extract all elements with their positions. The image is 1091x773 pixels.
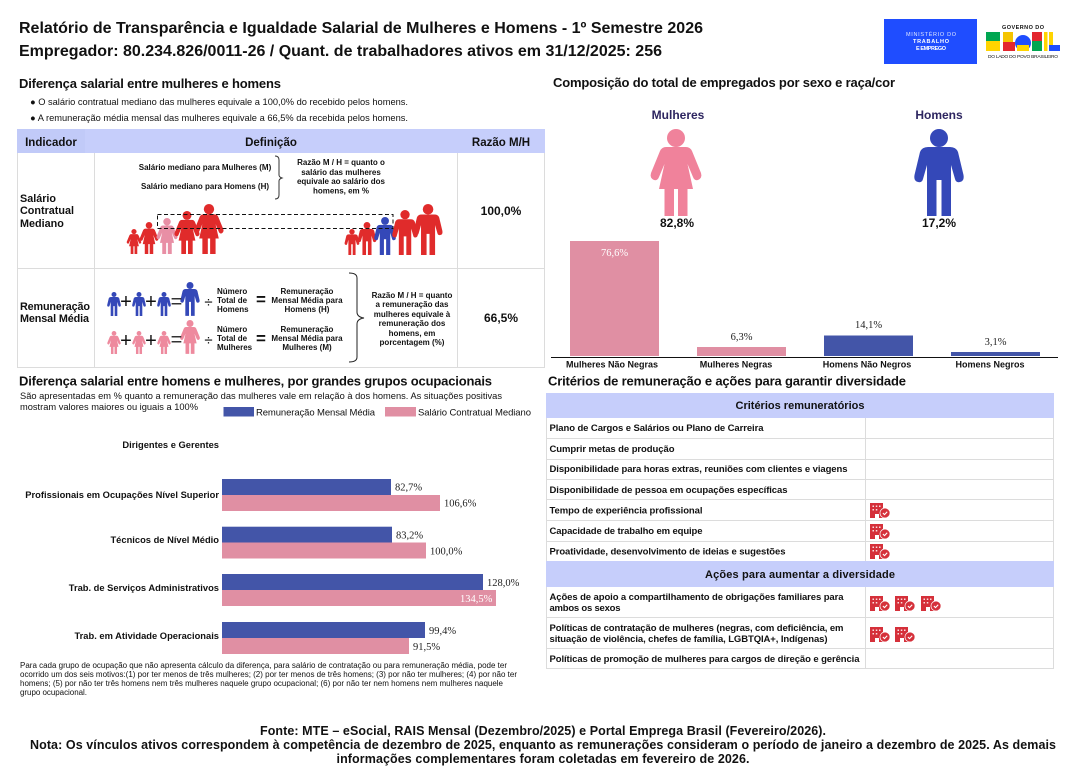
table header xyxy=(17,129,545,153)
footer: fonte e nota: Fonte: MTE – eSocial, RAIS Mensal (Dezembro/2025) e Portal Emprega Brasil (Fevereiro/2026). xyxy=(260,724,826,738)
footnote: ocorrido um dos seis motivos:(1) por ter menos de três mulheres; (2) por ter menos de três homens; (3) por não ter mulheres; (4) por não ter xyxy=(20,670,517,679)
group: administrativos: 128,0% xyxy=(487,578,520,589)
group: técnicos: 83,2% xyxy=(396,530,423,542)
row: remuneração mensal média: Mensal Média xyxy=(20,313,90,325)
row: remuneração mensal média: Mulheres (M) xyxy=(282,343,332,352)
panel: tabela de indicadores xyxy=(17,129,545,368)
row: remuneração mensal média: Remuneração xyxy=(20,301,90,313)
bullets: resumo: ● A remuneração média mensal das mulheres equivale a 66,5% da recebida pelos homens. xyxy=(30,113,408,123)
row: salário contratual mediano: Salário mediano para Homens (H) xyxy=(141,182,269,191)
footnote: grupo ocupacional. xyxy=(20,688,87,697)
text: explicação do gráfico xyxy=(20,391,502,412)
row: remuneração mensal média xyxy=(20,273,518,362)
row: remuneração mensal média: ÷ xyxy=(204,332,213,349)
row: remuneração mensal média: Número xyxy=(217,325,247,334)
table header: Indicador xyxy=(25,137,77,149)
header: critérios remuneratórios: Critérios remuneratórios xyxy=(736,400,864,412)
rows: critérios: Plano de Cargos e Salários ou Plano de Carreira xyxy=(550,423,764,434)
row: salário contratual mediano: Mediano xyxy=(20,218,64,230)
figure: homens xyxy=(914,108,964,230)
legend: Remuneração Mensal Média xyxy=(256,408,376,418)
footnote xyxy=(20,661,517,697)
group: operacionais: 91,5% xyxy=(413,642,440,653)
title: Relatório de Transparência e Igualdade Salarial de Mulheres e Homens - 1º Semestre 2026 xyxy=(19,20,703,37)
row: remuneração mensal média: + xyxy=(120,291,132,313)
group: operacionais xyxy=(74,622,456,654)
rows: critérios: Capacidade de trabalho em equipe xyxy=(550,526,702,537)
table header: Razão M/H xyxy=(472,137,530,149)
row: remuneração mensal média: remuneração dos xyxy=(379,319,446,328)
group: profissionais: Profissionais em Ocupações Nível Superior xyxy=(25,490,219,500)
bar chart: composição por sexo e raça: 14,1% xyxy=(855,320,882,331)
rows: critérios xyxy=(550,423,848,558)
row: remuneração mensal média: Homens xyxy=(217,305,249,314)
bar chart: composição por sexo e raça xyxy=(551,241,1058,370)
footnote: Para cada grupo de ocupação que não apresenta cálculo da diferença, para salário de contratação ou para remuneração média, pode ter xyxy=(20,661,507,670)
bar chart: composição por sexo e raça: 3,1% xyxy=(985,337,1007,348)
row: remuneração mensal média: Remuneração xyxy=(281,287,334,296)
group: administrativos: 134,5% xyxy=(460,594,493,605)
row: remuneração mensal média: Mensal Média para xyxy=(271,296,343,305)
panel: critérios e ações xyxy=(546,393,1054,668)
row: salário contratual mediano: Contratual xyxy=(20,205,74,217)
heading: diferença salarial: Diferença salarial entre mulheres e homens xyxy=(19,76,281,91)
group: administrativos: Trab. de Serviços Administrativos xyxy=(69,583,219,593)
text: explicação do gráfico: São apresentadas em % quanto a remuneração das mulheres vale em relação à dos homens. As situações positivas xyxy=(20,391,502,401)
row: remuneração mensal média: = xyxy=(256,290,266,309)
rows: ações xyxy=(550,592,860,665)
icons: ações xyxy=(870,596,941,642)
group: profissionais xyxy=(25,479,477,511)
text: explicação do gráfico: mostram valores maiores ou iguais a 100% xyxy=(20,402,198,412)
row: remuneração mensal média: = xyxy=(256,329,266,348)
logo: ministério e governo xyxy=(884,19,1060,64)
group: operacionais: Trab. em Atividade Operacionais xyxy=(74,631,219,641)
figure: mulheres: Mulheres xyxy=(652,108,705,122)
row: remuneração mensal média: ÷ xyxy=(204,294,213,311)
row: remuneração mensal média: porcentagem (%) xyxy=(380,338,445,347)
icons: mulheres xyxy=(127,204,224,254)
equação: homens xyxy=(107,282,200,316)
group: profissionais: 82,7% xyxy=(395,482,422,494)
row: remuneração mensal média: Mensal Média para xyxy=(271,334,343,343)
row: remuneração mensal média: Razão M / H = quanto xyxy=(372,291,452,300)
table header: Definição xyxy=(245,137,297,149)
icons: homens xyxy=(345,204,443,255)
icons: critérios xyxy=(870,503,890,559)
footer: fonte e nota: Nota: Os vínculos ativos correspondem à competência de dezembro de 2025, enquanto as remunerações consideram o período de janeiro a dezembro de 2025. As demais xyxy=(30,738,1056,752)
row: remuneração mensal média: = xyxy=(171,291,182,313)
row: salário contratual mediano xyxy=(20,156,522,255)
bar chart: composição por sexo e raça: 76,6% xyxy=(601,248,628,259)
rows: ações: Políticas de contratação de mulheres (negras, com deficiência, em xyxy=(550,623,844,634)
group: profissionais: 106,6% xyxy=(444,498,477,510)
figure: mulheres xyxy=(651,108,705,230)
group: técnicos xyxy=(110,527,463,558)
row: remuneração mensal média: Número xyxy=(217,287,247,296)
row: remuneração mensal média: a remuneração das xyxy=(376,300,449,309)
logo: ministério e governo: TRABALHO xyxy=(913,39,950,45)
heading: grupos ocupacionais: Diferença salarial entre homens e mulheres, por grandes grupos ocupacionais xyxy=(19,374,492,388)
title xyxy=(19,20,703,60)
row: salário contratual mediano: 100,0% xyxy=(481,204,522,218)
rows: critérios: Proatividade, desenvolvimento de ideias e sugestões xyxy=(550,546,786,558)
row: salário contratual mediano: homens, em % xyxy=(313,186,369,196)
logo: ministério e governo: DO LADO DO POVO BRASILEIRO xyxy=(988,54,1058,60)
rows: critérios: Disponibilidade para horas extras, reuniões com clientes e viagens xyxy=(550,464,848,475)
title: Empregador: 80.234.826/0011-26 / Quant. de trabalhadores ativos em 31/12/2025: 256 xyxy=(19,43,662,60)
bar chart: composição por sexo e raça: Mulheres Não Negras xyxy=(566,360,658,370)
group: operacionais: 99,4% xyxy=(429,626,456,637)
bullets: resumo: ● O salário contratual mediano das mulheres equivale a 100,0% do recebido pelos homens. xyxy=(30,97,408,107)
row: salário contratual mediano: salário das mulheres xyxy=(301,168,381,177)
row: salário contratual mediano: Salário xyxy=(20,193,56,205)
row: salário contratual mediano: equivale ao salário dos xyxy=(297,177,386,186)
group: técnicos: Técnicos de Nível Médio xyxy=(110,535,219,545)
row: salário contratual mediano: Razão M / H = quanto o xyxy=(297,158,385,167)
row: remuneração mensal média: Remuneração xyxy=(281,325,334,334)
figure: mulheres: 82,8% xyxy=(660,216,694,230)
row: remuneração mensal média: 66,5% xyxy=(484,311,518,325)
row: remuneração mensal média: + xyxy=(120,330,132,352)
row: remuneração mensal média: = xyxy=(171,329,182,351)
row: remuneração mensal média: Total de xyxy=(217,296,248,305)
legend: Salário Contratual Mediano xyxy=(418,408,531,418)
group: administrativos xyxy=(69,574,520,606)
row: remuneração mensal média: + xyxy=(145,330,157,352)
header: critérios remuneratórios xyxy=(546,393,1054,418)
row: remuneração mensal média: mulheres equivale à xyxy=(374,310,451,319)
rows: critérios: Cumprir metas de produção xyxy=(550,444,675,455)
header: ações para diversidade xyxy=(546,561,1054,587)
row: remuneração mensal média: + xyxy=(145,291,157,313)
bar chart: grupos ocupacionais: Dirigentes e Gerentes xyxy=(122,440,219,450)
footer: fonte e nota xyxy=(30,724,1056,766)
bar chart: composição por sexo e raça: Homens Negros xyxy=(955,360,1025,370)
rows: critérios: Tempo de experiência profissional xyxy=(550,506,702,516)
logo: ministério e governo: E EMPREGO xyxy=(916,46,947,52)
heading: composição: Composição do total de empregados por sexo e raça/cor xyxy=(553,75,895,90)
row: salário contratual mediano: Salário mediano para Mulheres (M) xyxy=(139,163,272,172)
header: ações para diversidade: Ações para aumentar a diversidade xyxy=(705,569,895,581)
logo: ministério e governo: MINISTÉRIO DO xyxy=(906,31,957,38)
row: remuneração mensal média: Homens (H) xyxy=(285,305,330,314)
rows: critérios: Disponibilidade de pessoa em ocupações específicas xyxy=(550,485,788,496)
footnote: homens; (5) por não ter três homens nem três mulheres naquele grupo ocupacional; (6) por não ter nem homens nem mulheres naquele xyxy=(20,679,504,688)
heading: critérios: Critérios de remuneração e ações para garantir diversidade xyxy=(548,374,906,388)
rows: ações: ambos os sexos xyxy=(550,603,620,614)
equação: mulheres xyxy=(107,320,200,354)
figure: homens: Homens xyxy=(915,108,963,122)
bar chart: composição por sexo e raça: 6,3% xyxy=(731,332,753,343)
group: técnicos: 100,0% xyxy=(430,546,463,558)
row: remuneração mensal média: Total de xyxy=(217,334,248,343)
rows: ações: Ações de apoio a compartilhamento de obrigações familiares para xyxy=(550,592,844,603)
bar chart: grupos ocupacionais xyxy=(25,440,520,654)
bullets: resumo xyxy=(30,97,408,123)
row: remuneração mensal média: homens, em xyxy=(389,329,435,338)
row: remuneração mensal média: Mulheres xyxy=(217,343,253,352)
figure: homens: 17,2% xyxy=(922,216,956,230)
rows: ações: Políticas de promoção de mulheres para cargos de direção e gerência xyxy=(550,654,860,665)
rows: ações: situação de violência, chefes de família, LGBTQIA+, Indígenas) xyxy=(550,634,828,645)
bar chart: composição por sexo e raça: Homens Não Negros xyxy=(823,360,911,370)
legend xyxy=(224,407,531,418)
footer: fonte e nota: informações complementares foram coletadas em fevereiro de 2026. xyxy=(336,752,750,766)
bar chart: composição por sexo e raça: Mulheres Negras xyxy=(700,360,772,370)
logo: ministério e governo: GOVERNO DO xyxy=(1002,25,1045,31)
